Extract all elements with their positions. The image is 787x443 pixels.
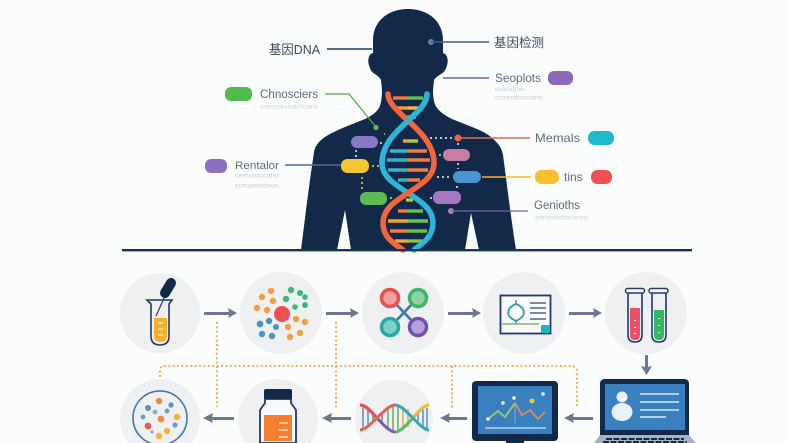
icon: report document — [500, 296, 550, 334]
marker pills and dotted connectors — [341, 134, 481, 205]
orange dotted feedback lines — [160, 322, 577, 408]
label: 基因检测: 基因检测 — [494, 35, 544, 50]
label: Genioths: cestxtdocess — [535, 214, 589, 222]
label: Seoplus: ccnrotcccons — [495, 94, 544, 102]
icon: dna horizontal — [360, 405, 429, 432]
icon: laptop with profile — [594, 379, 696, 443]
label: 基因检测 — [428, 35, 544, 50]
step circles — [120, 272, 687, 443]
label: Rentalor — [205, 159, 341, 190]
label: Genioths — [448, 200, 589, 222]
dna helix — [382, 94, 434, 250]
icon: monitor with chart — [472, 381, 558, 443]
orange strand — [383, 94, 434, 250]
human silhouette — [301, 9, 516, 250]
icon: molecule network — [382, 290, 426, 336]
workflow arrows — [203, 308, 652, 423]
label: Chnosciers: Chnosciers — [260, 89, 318, 101]
icon: test tube with dropper — [147, 283, 172, 345]
label: Seoplus — [443, 71, 573, 102]
icon: medicine bottle — [260, 389, 296, 443]
icon: petri dish — [133, 391, 187, 443]
panel: body diagram — [301, 9, 516, 250]
dna rungs — [387, 98, 430, 241]
label: Chnosciers: concassaricars — [260, 104, 319, 110]
label: 基因DNA — [269, 42, 372, 57]
blue strand — [382, 94, 433, 250]
label: tins: tins — [564, 170, 583, 184]
label: 基因DNA: 基因DNA — [269, 42, 320, 57]
icon: two sample tubes — [626, 288, 668, 342]
label: Seoplus: Seoplots — [495, 71, 541, 85]
blue strand upper crossing — [382, 94, 427, 163]
label: Memals — [454, 131, 614, 145]
label: Memals: Memals — [535, 131, 580, 145]
panel: workflow — [120, 272, 696, 443]
label: Rentalor: Rentalor — [235, 160, 279, 172]
icon: cell cluster — [254, 287, 308, 340]
label: Chnosciers — [225, 87, 379, 130]
label: tins — [482, 170, 612, 184]
label: Seoplus: ccncvgne — [495, 86, 524, 93]
label: Rentalor: ceroodoottst — [235, 172, 279, 180]
divider — [122, 249, 692, 251]
label: Rentalor: coruptstooos — [235, 182, 280, 190]
label: Genioths: Genioths — [534, 200, 580, 212]
